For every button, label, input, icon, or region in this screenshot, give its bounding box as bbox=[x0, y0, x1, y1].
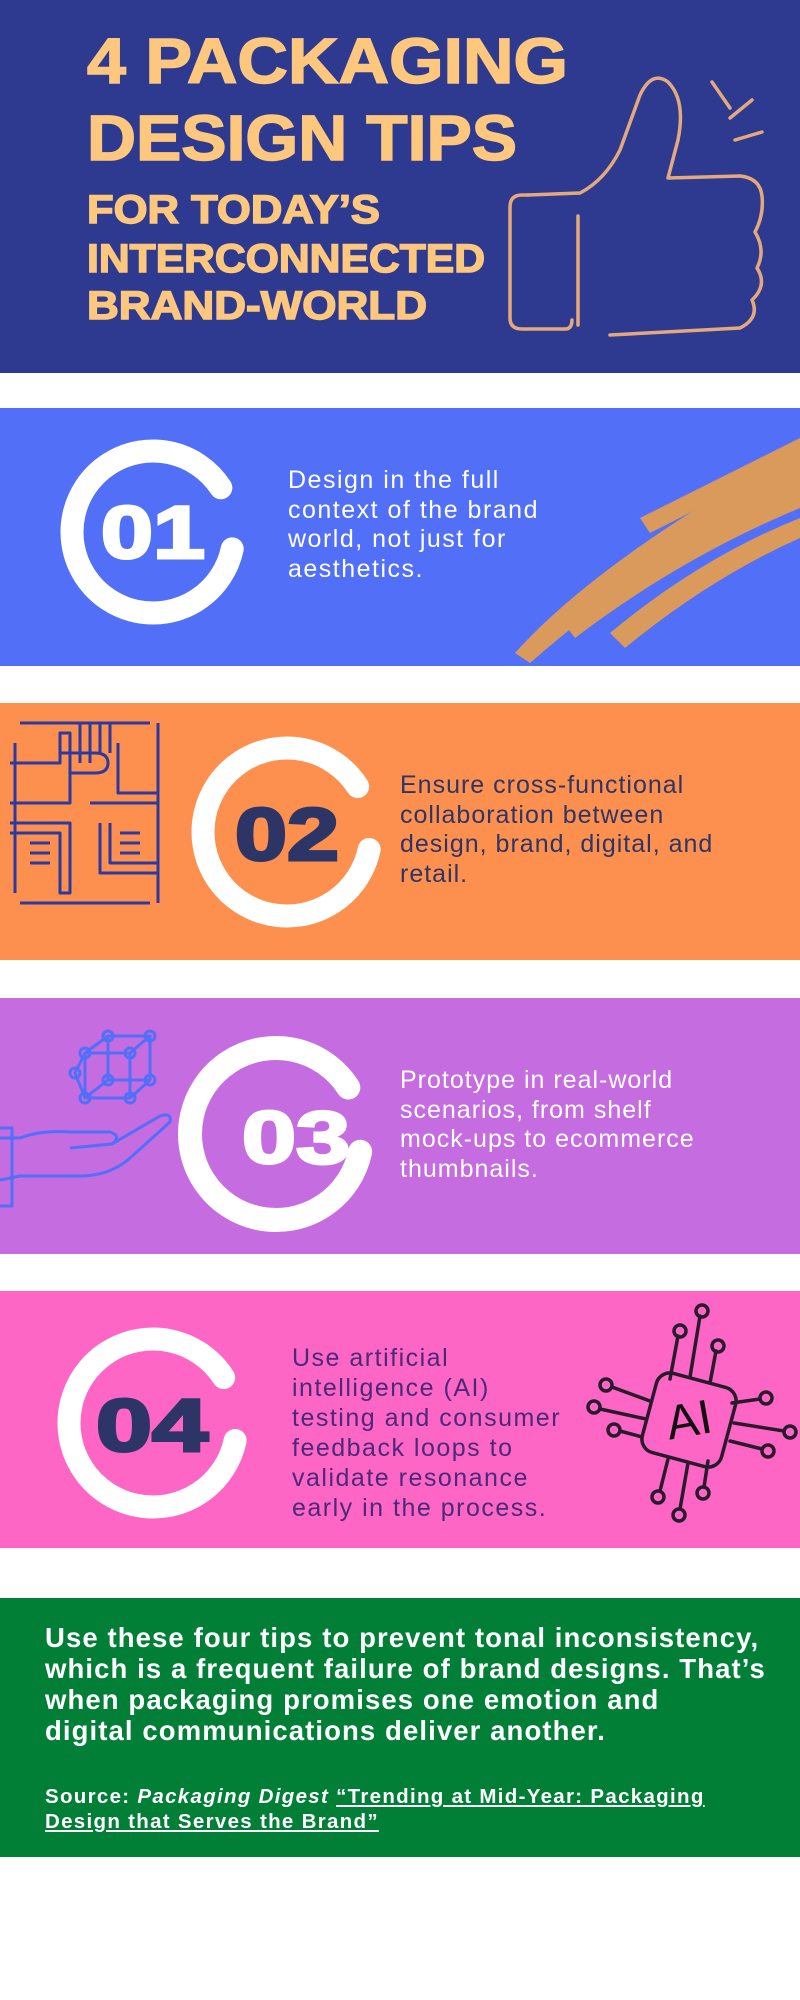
icon: AI chip: AI bbox=[662, 1390, 716, 1451]
icon: AI chip bbox=[588, 1305, 796, 1521]
text: conclusion bbox=[44, 1622, 766, 1746]
icon: hand holding cube bbox=[0, 1031, 170, 1206]
text: tip 04: testing and consumer bbox=[292, 1404, 561, 1432]
text: tip 03: thumbnails. bbox=[400, 1154, 539, 1182]
number circle 02: 02 bbox=[235, 793, 339, 876]
panel: tip 01 bbox=[0, 408, 800, 666]
text: tip 04: early in the process. bbox=[292, 1494, 547, 1522]
text: tip 03: Prototype in real-world bbox=[400, 1066, 673, 1094]
text: tip 03: mock-ups to ecommerce bbox=[400, 1125, 695, 1153]
text: tip 02: collaboration between bbox=[400, 800, 664, 828]
panel: tip 03 bbox=[0, 998, 800, 1254]
number circle 04: 04 bbox=[96, 1384, 208, 1467]
text: tip 03: scenarios, from shelf bbox=[400, 1096, 652, 1124]
source citation bbox=[45, 1785, 705, 1833]
text: tip 04: feedback loops to bbox=[292, 1434, 513, 1462]
text: tip 01: aesthetics. bbox=[288, 554, 424, 582]
icon: thumbs up bbox=[510, 78, 762, 335]
number circle 01 bbox=[57, 436, 249, 628]
number circle 03: 03 bbox=[242, 1096, 350, 1179]
text: tip 01: world, not just for bbox=[288, 525, 507, 553]
text: tip 04 bbox=[292, 1344, 561, 1522]
icon: handshake collaboration bbox=[10, 723, 158, 903]
title: BRAND-WORLD bbox=[87, 284, 427, 328]
title: DESIGN TIPS bbox=[87, 102, 517, 174]
text: tip 04: Use artificial bbox=[292, 1344, 449, 1372]
text: tip 01: context of the brand bbox=[288, 496, 539, 524]
text: conclusion: which is a frequent failure of brand designs. That’s bbox=[45, 1653, 766, 1684]
text: conclusion: digital communications deliver another. bbox=[45, 1715, 606, 1746]
text: tip 04: validate resonance bbox=[292, 1464, 529, 1492]
number circle 01: 01 bbox=[101, 491, 205, 574]
text: conclusion: when packaging promises one emotion and bbox=[45, 1684, 659, 1715]
title bbox=[87, 25, 568, 328]
panel: conclusion bbox=[0, 1598, 800, 1857]
title: 4 PACKAGING bbox=[87, 25, 568, 97]
text: tip 04: intelligence (AI) bbox=[292, 1374, 490, 1402]
brush stroke decoration bbox=[515, 438, 800, 663]
title: INTERCONNECTED bbox=[87, 237, 485, 281]
header banner bbox=[0, 0, 800, 373]
panel: tip 02 bbox=[0, 703, 800, 960]
text: conclusion: Use these four tips to prevent tonal inconsistency, bbox=[45, 1622, 759, 1653]
source citation: Design that Serves the Brand” bbox=[45, 1810, 379, 1833]
text: tip 01: Design in the full bbox=[288, 466, 500, 494]
number circle 04 bbox=[53, 1323, 253, 1523]
text: tip 03 bbox=[400, 1066, 695, 1182]
text: tip 02: Ensure cross-functional bbox=[400, 771, 684, 799]
number circle 02 bbox=[187, 732, 387, 932]
panel: tip 04 bbox=[0, 1291, 800, 1548]
text: tip 02: design, brand, digital, and bbox=[400, 830, 713, 858]
text: tip 01 bbox=[288, 466, 539, 582]
title: FOR TODAY’S bbox=[87, 188, 380, 232]
source citation: Source: Packaging Digest “Trending at Mid-Year: Packaging bbox=[45, 1785, 705, 1808]
number circle 03 bbox=[174, 1032, 378, 1236]
text: tip 02: retail. bbox=[400, 860, 468, 888]
text: tip 02 bbox=[400, 771, 713, 888]
